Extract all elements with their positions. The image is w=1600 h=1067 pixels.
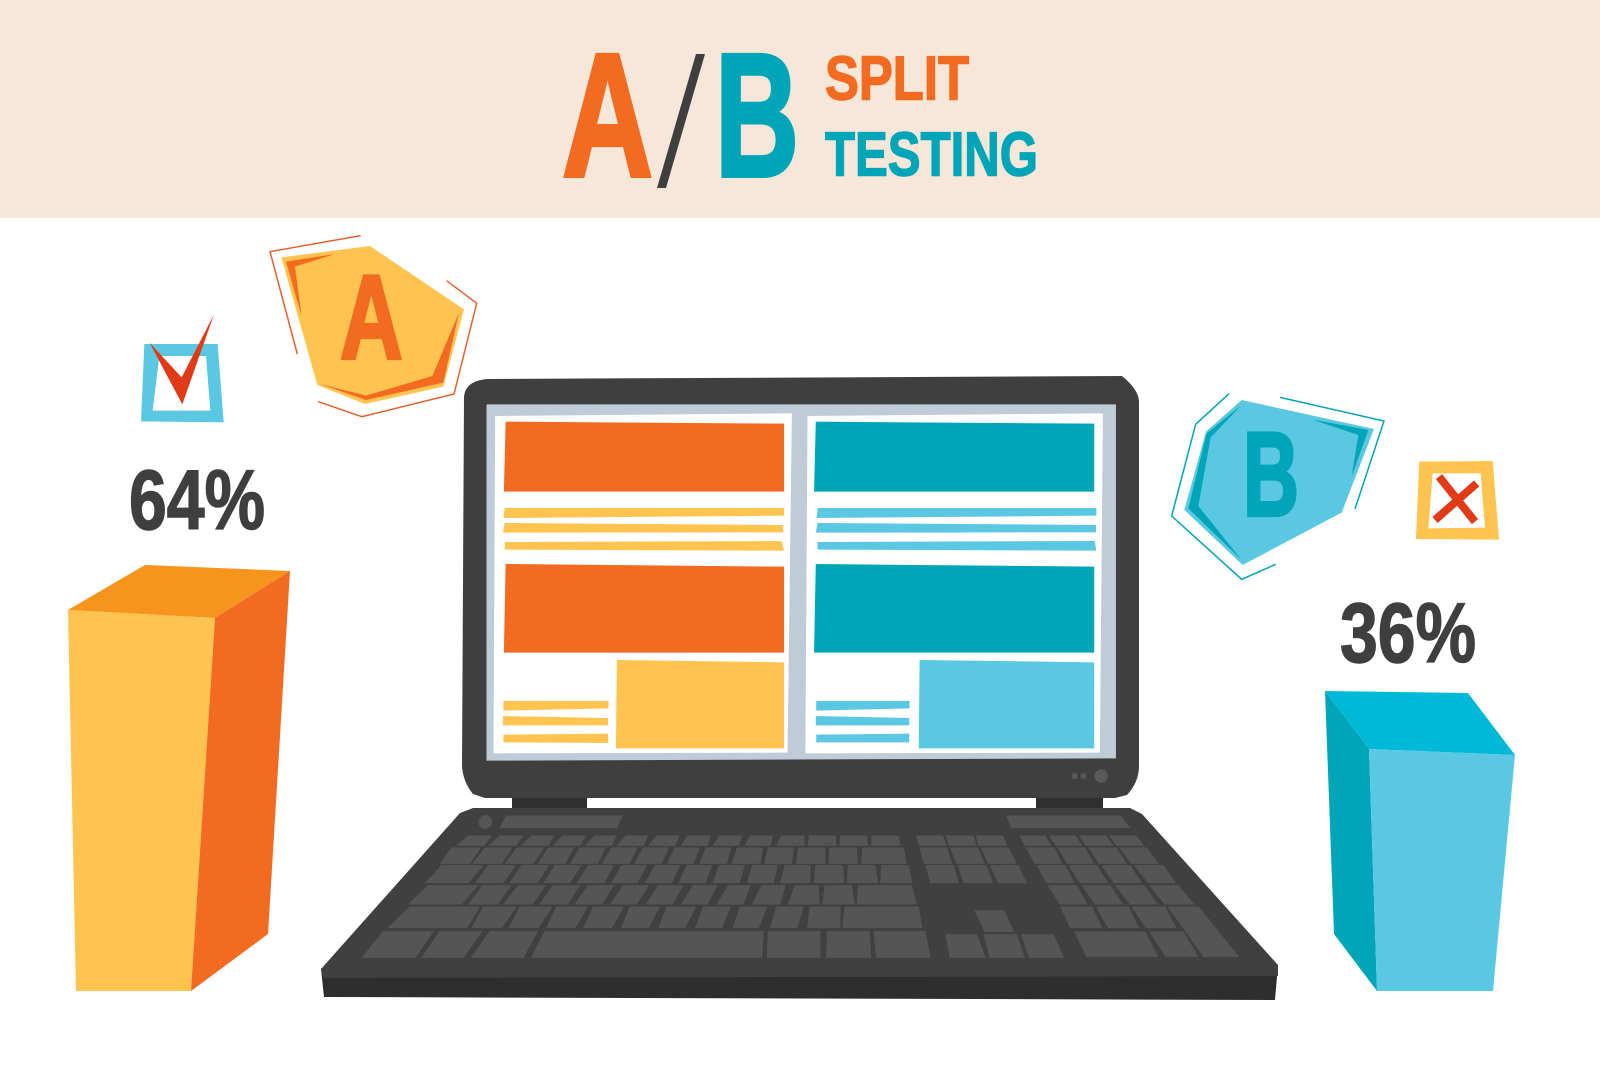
keyboard keys: [363, 816, 1238, 957]
keyboard base edge: [321, 965, 1278, 1000]
row 4: [388, 907, 479, 928]
monitor bezel: [462, 376, 1139, 798]
icon: cross box: [1416, 461, 1499, 540]
row 3: [409, 886, 477, 904]
title word TESTING: TESTING: [825, 120, 1038, 190]
header band: [0, 0, 1600, 218]
monitor screen: [487, 404, 1116, 783]
title slash: [657, 54, 705, 188]
title letter B: B: [715, 18, 799, 214]
row 0: [457, 836, 491, 845]
page variant B: [805, 413, 1103, 753]
stat: 64%: 64%: [129, 453, 265, 547]
monitor: [462, 376, 1139, 809]
monitor indicator lights: [1072, 769, 1108, 783]
page variant A: [493, 413, 792, 753]
stat: 36%: 36%: [1340, 586, 1476, 680]
badge B: [1172, 394, 1384, 579]
row 1: [441, 848, 480, 863]
bar chart: variant A bar: [68, 565, 290, 991]
title: A/B split testing: [562, 18, 1038, 214]
badge A: A: [340, 250, 403, 384]
badge A: [270, 236, 477, 417]
monitor stands: [512, 796, 1103, 809]
keyboard: [321, 808, 1278, 1000]
title letter A: A: [562, 18, 653, 214]
keyboard top surface: [321, 808, 1278, 978]
row 2: [426, 866, 483, 883]
badge B: B: [1243, 408, 1299, 542]
title word SPLIT: SPLIT: [825, 44, 969, 114]
icon: checkbox with tick: [141, 314, 224, 422]
row 5: [363, 931, 433, 957]
bar chart: variant B bar: [1325, 691, 1515, 991]
